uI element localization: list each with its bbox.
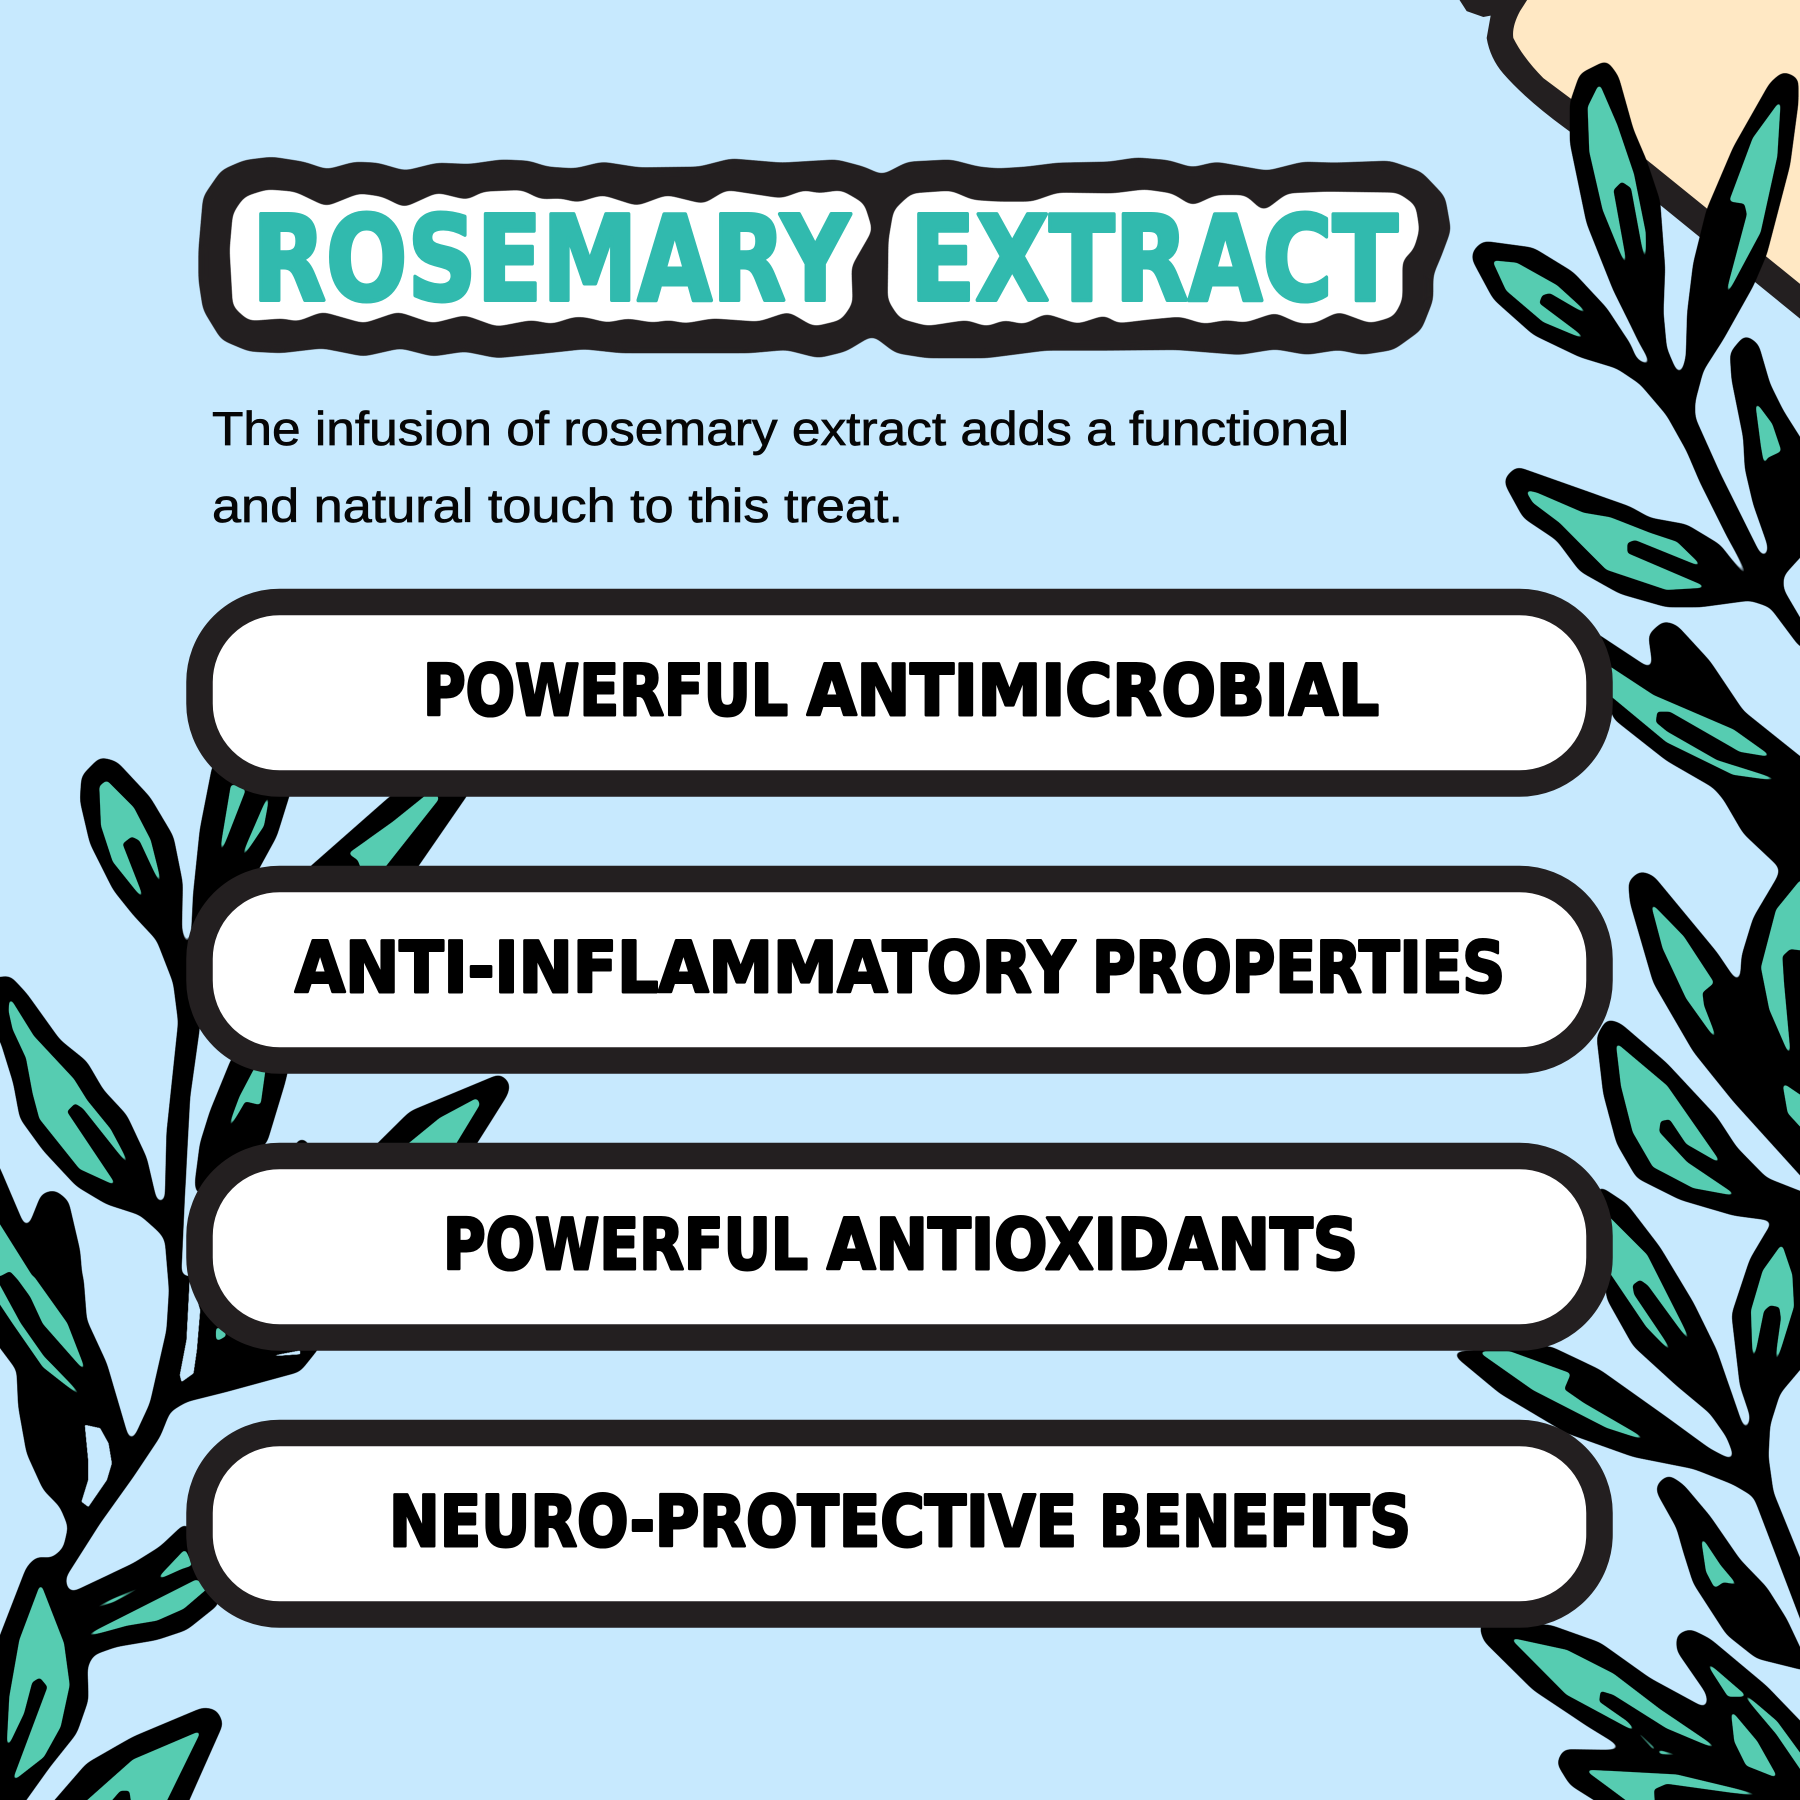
pill: powerful antioxidants: POWERFUL bbox=[443, 1204, 808, 1286]
right sprig outline bbox=[1450, 60, 1800, 1800]
pill: neuro-protective benefits: BENEFITS bbox=[1099, 1481, 1411, 1563]
pill: anti-inflammatory properties bbox=[200, 879, 1600, 1060]
pill: powerful antioxidants: ANTIOXIDANTS bbox=[827, 1204, 1358, 1286]
pill: anti-inflammatory properties: ANTI-INFLAMMATORY bbox=[295, 927, 1076, 1009]
left sprig outline bbox=[0, 757, 510, 1800]
pill: powerful antimicrobial bbox=[200, 602, 1600, 784]
pill: powerful antimicrobial: ANTIMICROBIAL bbox=[807, 650, 1379, 732]
title badge bbox=[198, 157, 1451, 358]
description text: and natural touch to this treat. bbox=[212, 479, 903, 532]
pill: neuro-protective benefits bbox=[200, 1433, 1600, 1614]
pill: neuro-protective benefits: NEURO-PROTECTIVE bbox=[389, 1481, 1077, 1563]
pill: anti-inflammatory properties: PROPERTIES bbox=[1092, 927, 1505, 1009]
left sprig gaps bbox=[82, 1277, 300, 1507]
title text: EXTRACT bbox=[910, 190, 1398, 328]
description text: The infusion of rosemary extract adds a functional bbox=[212, 402, 1349, 455]
pill: powerful antioxidants bbox=[200, 1156, 1600, 1338]
title white outline bbox=[230, 189, 1419, 327]
right rosemary sprig bbox=[1450, 60, 1800, 1800]
left rosemary sprig bbox=[0, 757, 510, 1800]
right sprig leaf fills bbox=[1480, 85, 1800, 1800]
left sprig leaf fills bbox=[0, 781, 479, 1800]
pill: powerful antimicrobial: POWERFUL bbox=[423, 650, 788, 732]
cream shape top right bbox=[1457, 0, 1800, 335]
title outline bbox=[198, 157, 1451, 358]
title text: ROSEMARY bbox=[252, 190, 851, 328]
